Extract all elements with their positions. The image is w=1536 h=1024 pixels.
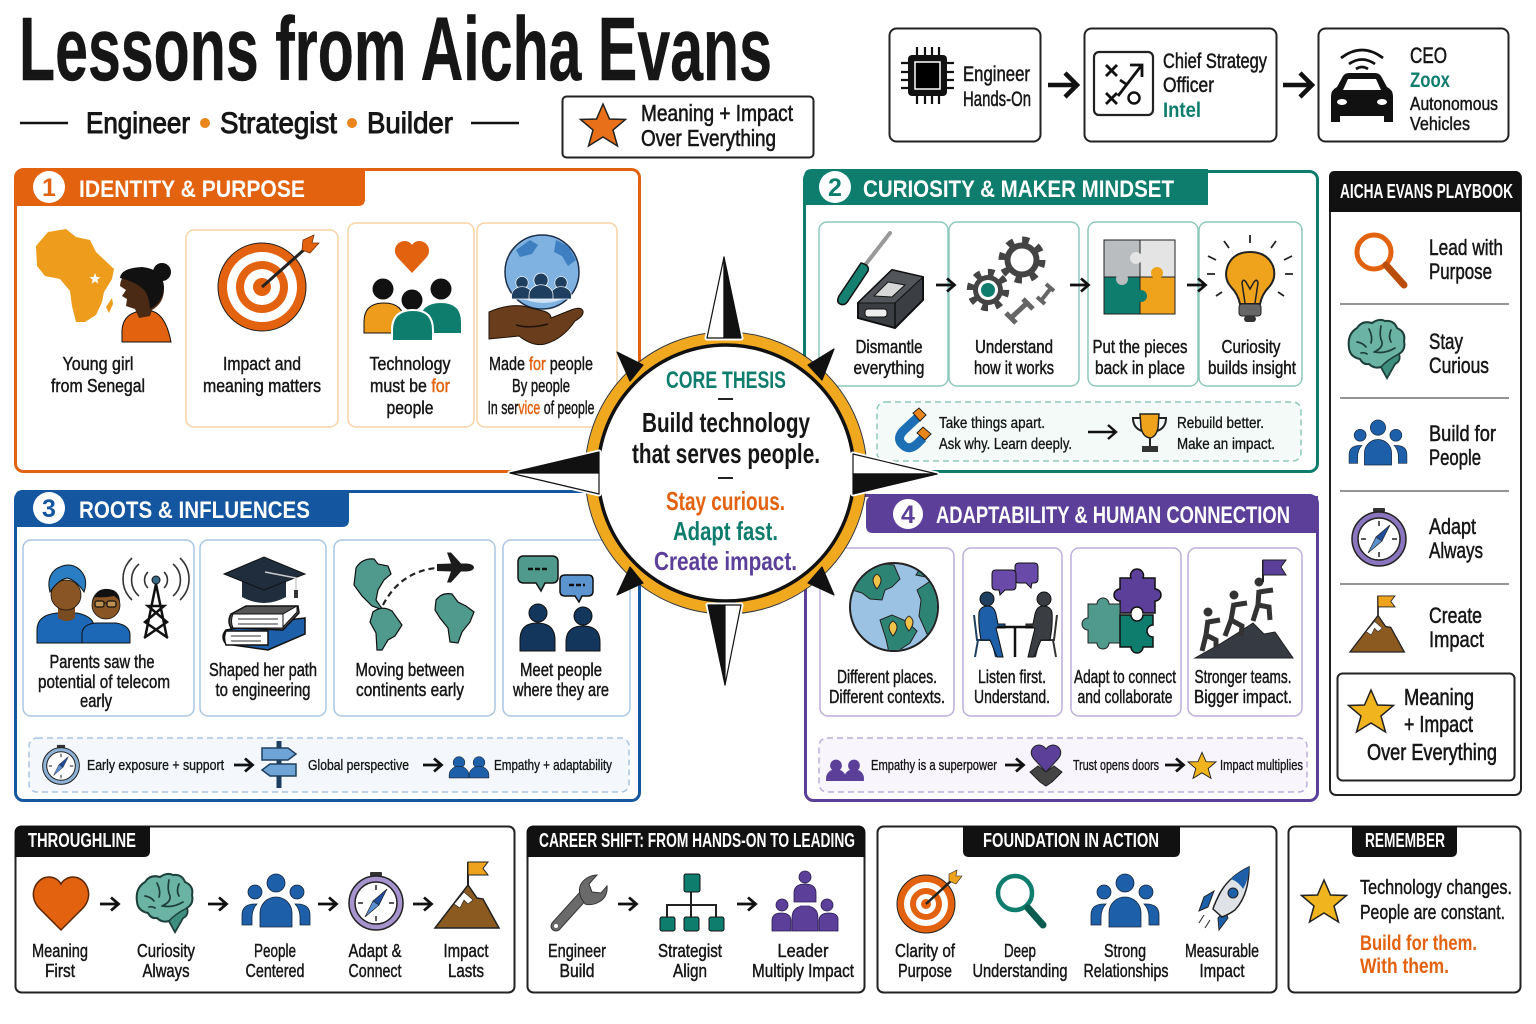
card: parents saw telecom — [23, 540, 194, 716]
card: moving between continents: continents early — [356, 680, 464, 700]
strip: take things apart, rebuild better: Make an impact. — [1177, 436, 1275, 453]
strip: take things apart, rebuild better: Take things apart. — [939, 415, 1045, 432]
strip: take things apart, rebuild better: Rebuild better. — [1177, 415, 1264, 432]
item: adapt always: Adapt — [1429, 514, 1476, 539]
item: clarity of purpose — [895, 870, 962, 981]
remember text: With them. — [1360, 955, 1449, 978]
card: listen first: Understand. — [974, 687, 1050, 707]
heading: adaptability & human connection — [866, 496, 1318, 533]
title: Lessons from Aicha Evans — [19, 0, 772, 100]
career: engineer: Engineer — [963, 63, 1030, 86]
sidebar: playbook — [1329, 171, 1521, 795]
panel: identity & purpose — [15, 169, 640, 472]
item: adapt & connect: Connect — [348, 961, 402, 981]
card: shaped her path: to engineering — [216, 680, 310, 700]
arrow — [208, 898, 226, 910]
career: CEO: CEO — [1410, 43, 1447, 68]
tab: foundation in action: FOUNDATION IN ACTION — [983, 830, 1159, 852]
career: CEO: Zoox — [1410, 69, 1450, 92]
card: adapt to connect — [1071, 548, 1181, 716]
card: technology for people: Technology — [370, 354, 450, 374]
card: parents saw telecom: early — [80, 691, 112, 711]
card: curiosity builds insight — [1199, 222, 1302, 386]
item: curiosity always — [137, 874, 195, 981]
arrow — [318, 898, 336, 910]
item: measurable impact: Measurable — [1185, 941, 1259, 961]
heading: identity & purpose: IDENTITY & PURPOSE — [79, 176, 305, 203]
card: stronger teams: Stronger teams. — [1194, 667, 1292, 687]
strip: empathy to impact: Impact multiplies — [1220, 757, 1303, 774]
core thesis text: CORE THESIS — [666, 367, 786, 394]
item: deep understanding — [972, 876, 1068, 981]
heading: roots & influences: ROOTS & INFLUENCES — [79, 497, 310, 524]
card: shaped her path — [200, 540, 326, 716]
strip: early exposure to empathy — [29, 738, 629, 792]
card: dismantle everything — [819, 222, 948, 386]
core thesis text: Build technology — [642, 407, 810, 438]
item: adapt always: Always — [1429, 538, 1483, 563]
card: parents saw telecom: potential of telecom — [38, 672, 170, 692]
career: CEO: Vehicles — [1410, 114, 1470, 134]
card: moving between continents — [334, 540, 495, 716]
item: engineer build: Build — [560, 961, 594, 981]
heading: curiosity & maker mindset: 2 — [828, 174, 842, 202]
item: create impact: Impact — [1429, 627, 1484, 652]
item: curiosity always: Curiosity — [137, 941, 195, 961]
item: people centered: People — [254, 941, 296, 961]
card: meet people where they are: Meet people — [520, 660, 602, 680]
item: impact lasts — [435, 862, 499, 981]
item: clarity of purpose: Purpose — [898, 961, 952, 981]
item: adapt always — [1352, 508, 1483, 566]
career: strategy officer — [1084, 28, 1276, 142]
item: strong relationships: Relationships — [1084, 961, 1168, 981]
panel: throughline — [15, 826, 514, 992]
tab: foundation in action — [963, 826, 1180, 857]
strip: early exposure to empathy: Global perspective — [308, 757, 409, 774]
callout: meaning + impact — [1338, 674, 1514, 780]
heading: curiosity & maker mindset — [804, 169, 1208, 205]
arrow — [936, 278, 954, 292]
icon: star — [1302, 880, 1346, 922]
card: made for people: By people — [512, 376, 570, 396]
card: put the pieces back: back in place — [1095, 358, 1185, 378]
heading: identity & purpose: 1 — [42, 174, 56, 202]
item: engineer build — [548, 875, 607, 981]
career path timeline — [890, 28, 1508, 142]
item: stay curious — [1349, 320, 1489, 378]
card: curiosity builds insight: Curiosity — [1222, 337, 1280, 357]
arrow — [1048, 73, 1077, 97]
item: build for people: Build for — [1429, 421, 1496, 446]
card: made for people: In service of people — [488, 398, 594, 418]
item: deep understanding: Understanding — [972, 961, 1068, 981]
card: made for people — [477, 223, 617, 427]
panel: career shift — [527, 826, 865, 992]
item: leader multiply impact — [752, 871, 854, 981]
item: lead with purpose: Lead with — [1429, 235, 1503, 260]
heading: curiosity & maker mindset: CURIOSITY & MAKER MINDSET — [863, 176, 1174, 203]
card: made for people: Made for people — [489, 354, 593, 374]
item: meaning first: First — [45, 961, 75, 981]
card: technology for people: must be for — [370, 376, 450, 396]
card: dismantle everything: everything — [854, 358, 924, 378]
remember text — [1360, 877, 1512, 978]
panel: foundation in action — [878, 826, 1276, 992]
item: create impact — [1350, 596, 1484, 652]
panel: roots & influences — [15, 490, 640, 800]
tab: throughline: THROUGHLINE — [28, 830, 136, 852]
arrow — [737, 898, 756, 910]
panel: adaptability & human connection — [806, 496, 1318, 800]
tab: remember: REMEMBER — [1365, 830, 1445, 852]
card: parents saw telecom: Parents saw the — [50, 652, 154, 672]
strip: empathy to impact — [819, 738, 1307, 792]
card: listen first: Listen first. — [978, 667, 1046, 687]
item: create impact: Create — [1429, 603, 1482, 628]
heading: roots & influences: 3 — [42, 495, 56, 523]
strip: early exposure to empathy: Early exposure + support — [87, 757, 225, 774]
panel: curiosity & maker mindset — [804, 169, 1318, 472]
item: leader multiply impact: Multiply Impact — [752, 961, 854, 981]
career: engineer — [890, 28, 1040, 142]
item: impact lasts: Impact — [444, 941, 488, 961]
arrow — [1283, 73, 1312, 97]
item: adapt & connect: Adapt & — [348, 941, 402, 961]
card: adapt to connect: Adapt to connect — [1074, 667, 1176, 687]
item: people centered: Centered — [246, 961, 304, 981]
callout: meaning + impact: Over Everything — [1367, 739, 1497, 765]
card: adapt to connect: and collaborate — [1078, 687, 1172, 707]
card: meet people where they are — [503, 540, 630, 716]
card: different places — [820, 548, 954, 716]
card: technology for people — [348, 223, 474, 427]
core thesis text: Create impact. — [654, 546, 797, 576]
strip: early exposure to empathy: Empathy + adaptability — [494, 757, 612, 774]
card: listen first — [963, 548, 1062, 716]
item: adapt & connect — [348, 872, 403, 981]
card: curiosity builds insight: builds insight — [1208, 358, 1296, 378]
sidebar heading — [1329, 171, 1521, 212]
core thesis text: that serves people. — [632, 438, 820, 469]
item: stay curious: Curious — [1429, 353, 1489, 378]
callout: meaning + impact: Meaning + Impact — [641, 100, 793, 126]
arrow — [1187, 278, 1206, 292]
heading: adaptability & human connection: ADAPTABILITY & HUMAN CONNECTION — [936, 502, 1290, 529]
arrow — [413, 898, 432, 910]
callout: meaning + impact: Meaning — [1404, 684, 1474, 710]
compass points — [510, 257, 937, 685]
tab: career shift: CAREER SHIFT: FROM HANDS-ON TO LEADING — [539, 830, 855, 852]
remember text: Build for them. — [1360, 932, 1477, 955]
strip: take things apart, rebuild better: Ask why. Learn deeply. — [939, 436, 1072, 453]
tab: career shift — [527, 826, 865, 857]
arrow — [618, 898, 636, 910]
card: understand how it works — [949, 222, 1079, 386]
card: moving between continents: Moving between — [356, 660, 464, 680]
core thesis text: Stay curious. — [666, 486, 785, 516]
item: strong relationships — [1084, 874, 1168, 981]
panel: remember — [1288, 826, 1520, 992]
career: engineer: Hands-On — [963, 88, 1031, 111]
item: meaning first — [32, 877, 89, 981]
card: technology for people: people — [386, 398, 434, 418]
card: put the pieces back: Put the pieces — [1092, 337, 1188, 357]
heading: roots & influences — [15, 490, 349, 527]
item: stay curious: Stay — [1429, 329, 1463, 354]
callout: meaning + impact — [562, 96, 814, 158]
item: strong relationships: Strong — [1104, 941, 1146, 961]
item: young girl from Senegal: Young girl — [62, 354, 134, 374]
core thesis text — [632, 367, 820, 576]
card: understand how it works: Understand — [975, 337, 1053, 357]
compass: core thesis — [510, 257, 937, 685]
item: build for people: People — [1429, 445, 1481, 470]
callout: meaning + impact: Over Everything — [641, 125, 776, 151]
card: impact and meaning: meaning matters — [203, 376, 321, 396]
item: leader multiply impact: Leader — [778, 941, 828, 961]
item: people centered — [242, 874, 310, 981]
card: stronger teams: Bigger impact. — [1194, 687, 1292, 707]
item: measurable impact — [1185, 867, 1259, 981]
arrow — [100, 898, 118, 910]
subtitle: Engineer — [86, 107, 190, 140]
career: CEO: Autonomous — [1410, 94, 1498, 114]
subtitle — [20, 107, 519, 140]
card: different places: Different contexts. — [829, 687, 945, 707]
card: dismantle everything: Dismantle — [856, 337, 922, 357]
item: impact lasts: Lasts — [448, 961, 484, 981]
item: measurable impact: Impact — [1200, 961, 1244, 981]
heading: adaptability & human connection: 4 — [901, 501, 915, 529]
item: engineer build: Engineer — [548, 941, 606, 961]
item: lead with purpose: Purpose — [1429, 259, 1492, 284]
item: strategist align — [658, 874, 724, 981]
arrow — [1070, 278, 1088, 292]
core thesis text: Adapt fast. — [673, 516, 778, 546]
card: impact and meaning: Impact and — [223, 354, 301, 374]
tab: throughline — [15, 826, 150, 857]
subtitle: Strategist — [220, 107, 338, 140]
card: shaped her path: Shaped her path — [209, 660, 317, 680]
item: build for people — [1349, 420, 1496, 470]
heading: identity & purpose — [15, 169, 365, 206]
strip: take things apart, rebuild better — [877, 402, 1301, 461]
card: put the pieces back — [1088, 222, 1198, 386]
card: different places: Different places. — [837, 667, 937, 687]
card: stronger teams — [1188, 548, 1302, 716]
career: strategy officer: Chief Strategy — [1163, 50, 1267, 73]
card: meet people where they are: where they are — [512, 680, 609, 700]
card: impact and meaning — [186, 230, 338, 427]
strip: empathy to impact: Empathy is a superpower — [871, 757, 997, 774]
item: clarity of purpose: Clarity of — [895, 941, 956, 961]
item: strategist align: Strategist — [658, 941, 722, 961]
callout: meaning + impact: + Impact — [1404, 711, 1473, 737]
card: understand how it works: how it works — [974, 358, 1054, 378]
career: CEO — [1318, 28, 1508, 142]
item: strategist align: Align — [673, 961, 707, 981]
item: young girl from Senegal: from Senegal — [51, 376, 145, 396]
item: curiosity always: Always — [142, 961, 190, 981]
tab: remember — [1352, 826, 1457, 857]
item: lead with purpose — [1357, 235, 1503, 285]
item: meaning first: Meaning — [32, 941, 88, 961]
career: strategy officer: Officer — [1163, 74, 1214, 97]
career: strategy officer: Intel — [1163, 99, 1201, 122]
strip: empathy to impact: Trust opens doors — [1073, 757, 1159, 774]
item: young girl from Senegal — [36, 229, 171, 396]
item: deep understanding: Deep — [1004, 941, 1036, 961]
subtitle: Builder — [367, 107, 453, 140]
